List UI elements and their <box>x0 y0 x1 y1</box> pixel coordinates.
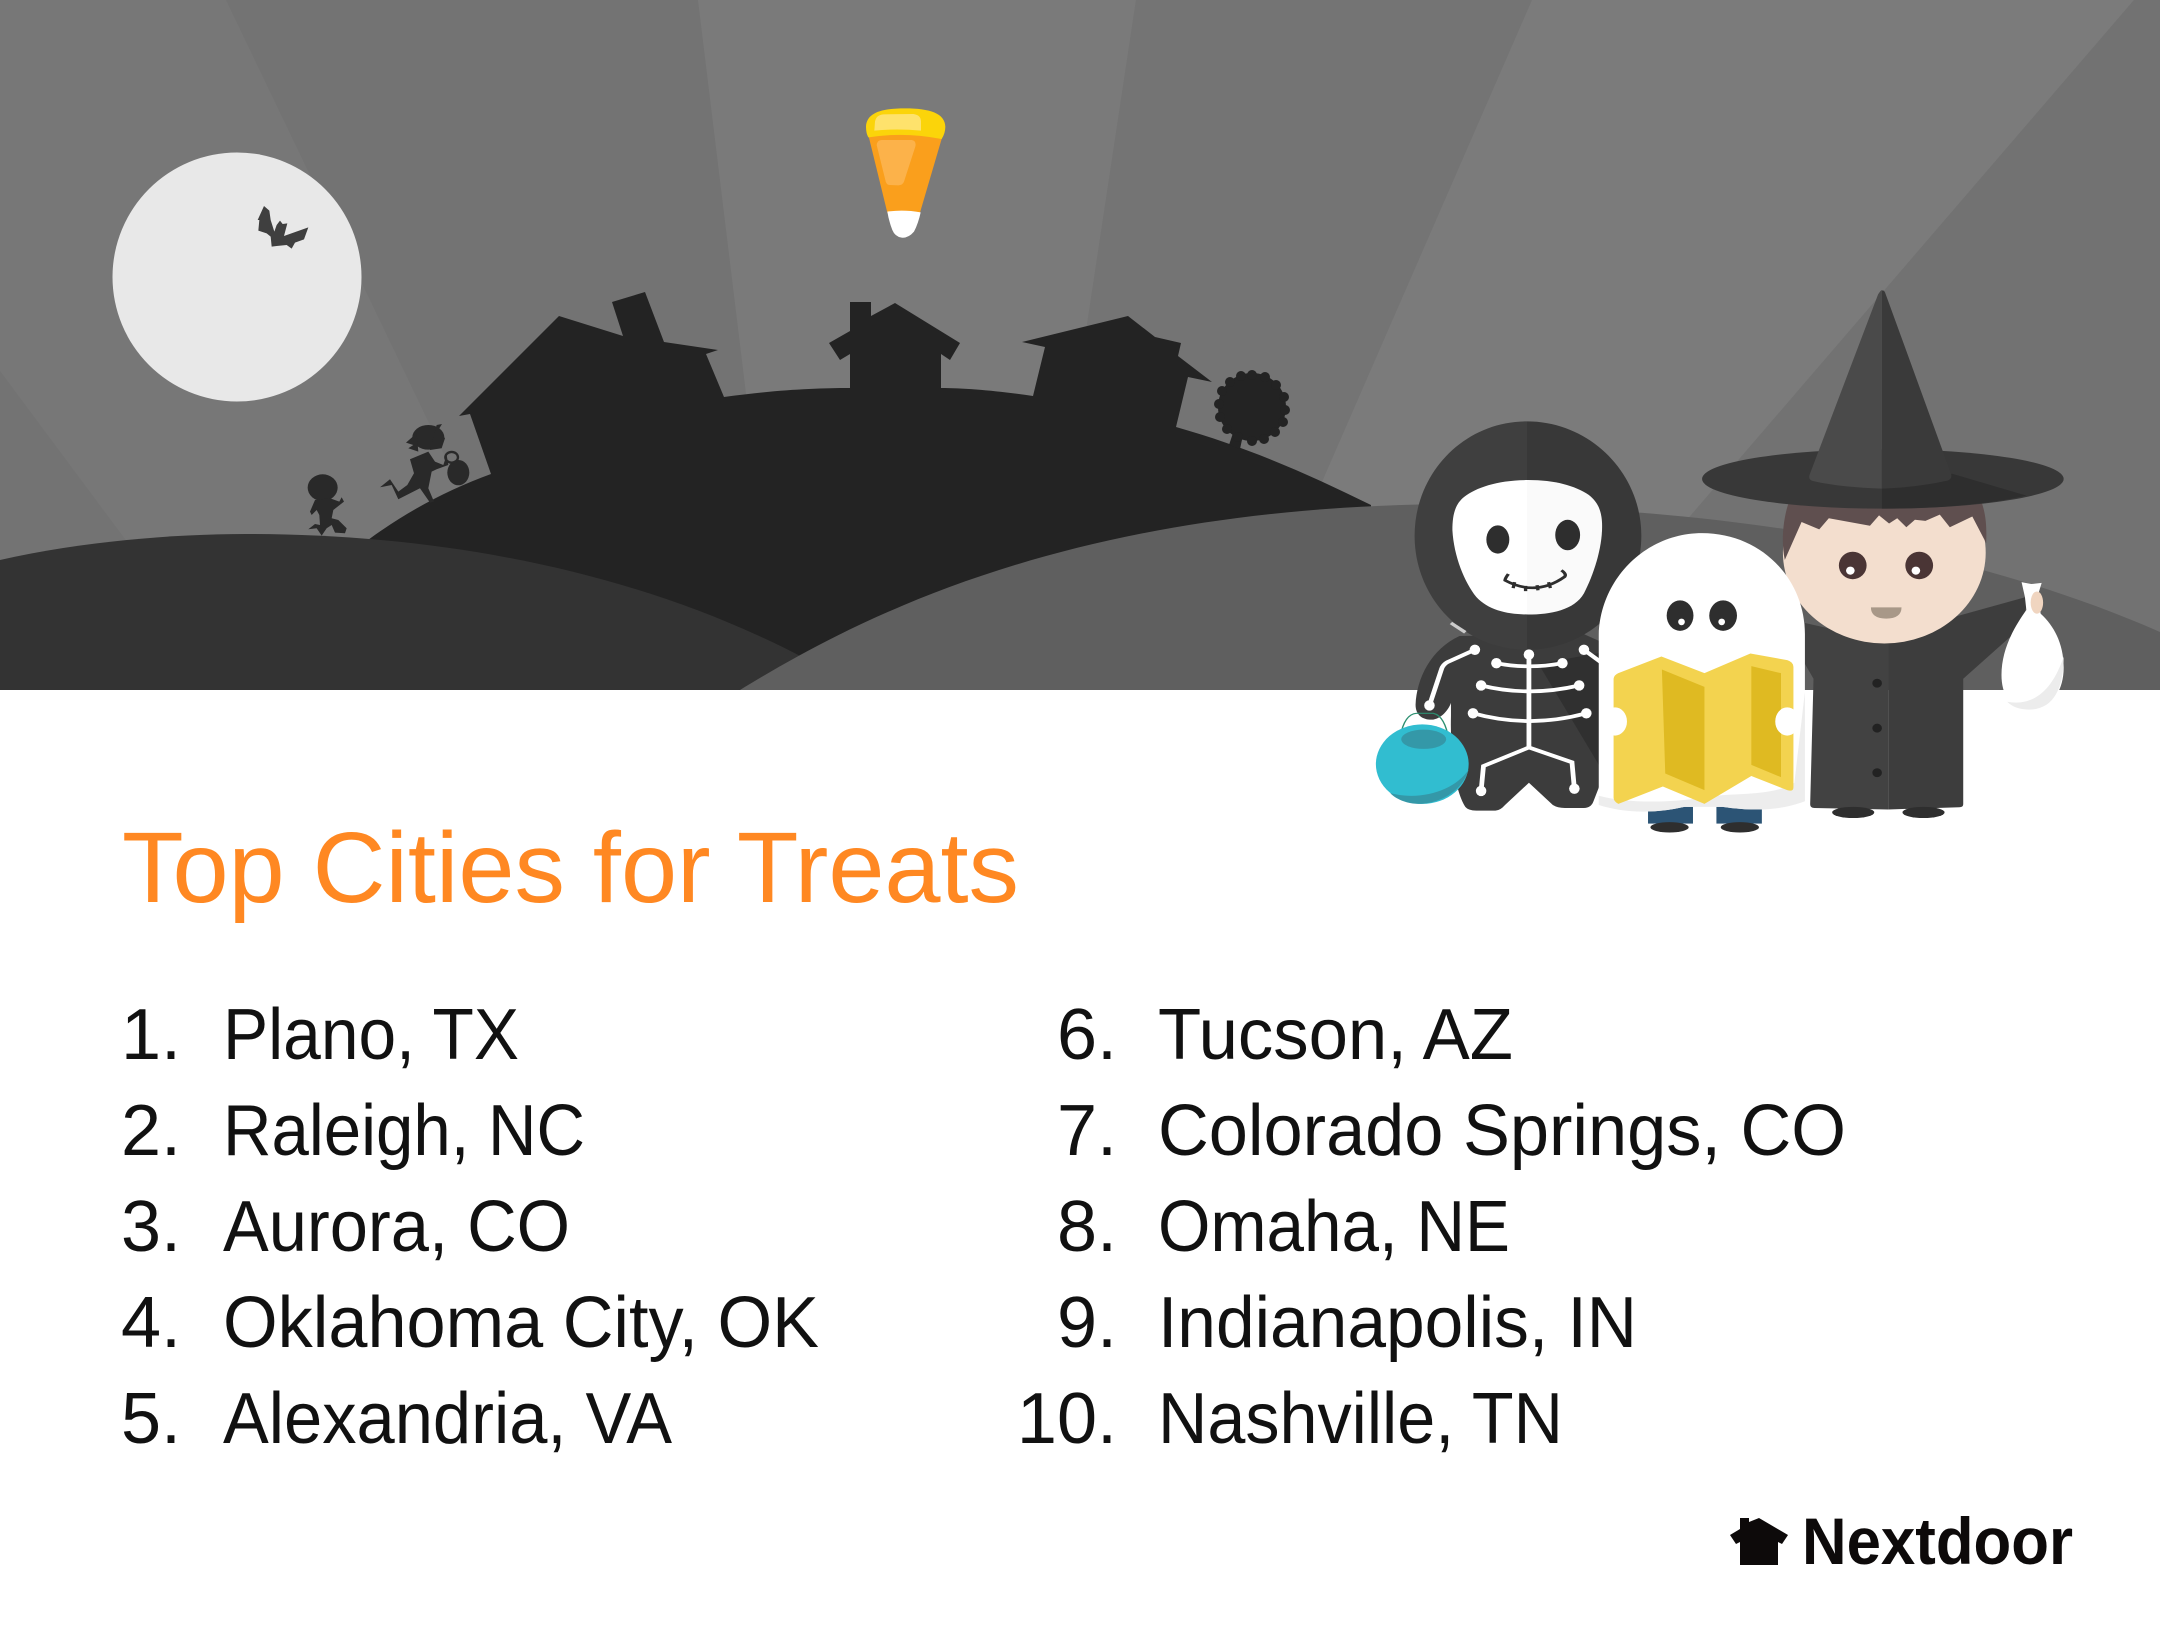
icon: bat <box>258 206 308 249</box>
list: cities 6 to 10: Nashville, TN <box>1158 1379 1563 1459</box>
list: cities 1 to 5: 3. <box>121 1187 181 1267</box>
list: cities 6 to 10: Indianapolis, IN <box>1158 1283 1637 1363</box>
background rays <box>0 0 2160 632</box>
front-left hill <box>0 534 860 690</box>
icon: teal candy bucket <box>1376 713 1469 804</box>
list: cities 1 to 5: Oklahoma City, OK <box>223 1283 819 1363</box>
icon: house <box>1730 1518 1788 1565</box>
illustration: costumed kids <box>1376 290 2064 832</box>
list: cities 6 to 10 <box>1017 995 1846 1459</box>
list: cities 6 to 10: 7. <box>1057 1091 1117 1171</box>
list: cities 1 to 5: 2. <box>121 1091 181 1171</box>
list: cities 1 to 5: 4. <box>121 1283 181 1363</box>
icon: tree <box>1214 370 1290 449</box>
list: cities 1 to 5: 5. <box>121 1379 181 1459</box>
list: cities 6 to 10: Colorado Springs, CO <box>1158 1091 1846 1171</box>
character: ghost <box>1599 533 1805 832</box>
list: cities 1 to 5: Aurora, CO <box>223 1187 570 1267</box>
Nextdoor logo: Nextdoor <box>1802 1504 2073 1578</box>
icon: candy corn <box>866 108 945 238</box>
list: cities 1 to 5: Plano, TX <box>223 995 519 1075</box>
list: cities 1 to 5: Alexandria, VA <box>223 1379 672 1459</box>
list: cities 6 to 10: 8. <box>1057 1187 1117 1267</box>
moon <box>112 152 362 402</box>
list: cities 1 to 5: 1. <box>121 995 181 1075</box>
list: cities 6 to 10: 9. <box>1057 1283 1117 1363</box>
hill with houses silhouette <box>368 292 1371 690</box>
character: witch <box>1702 290 2064 818</box>
title: Top Cities for Treats <box>122 812 1019 924</box>
list: cities 6 to 10: Omaha, NE <box>1158 1187 1510 1267</box>
right hill <box>740 504 2160 690</box>
icon: treat bag <box>2001 582 2064 710</box>
icon: folded map <box>1614 653 1793 804</box>
list: cities 1 to 5: Raleigh, NC <box>223 1091 585 1171</box>
list: cities 6 to 10: 10. <box>1017 1379 1117 1459</box>
list: cities 6 to 10: 6. <box>1057 995 1117 1075</box>
list: cities 6 to 10: Tucson, AZ <box>1158 995 1513 1075</box>
list: cities 1 to 5 <box>121 995 819 1459</box>
silhouette: trick-or-treaters <box>308 424 469 536</box>
character: skeleton <box>1415 421 1641 811</box>
